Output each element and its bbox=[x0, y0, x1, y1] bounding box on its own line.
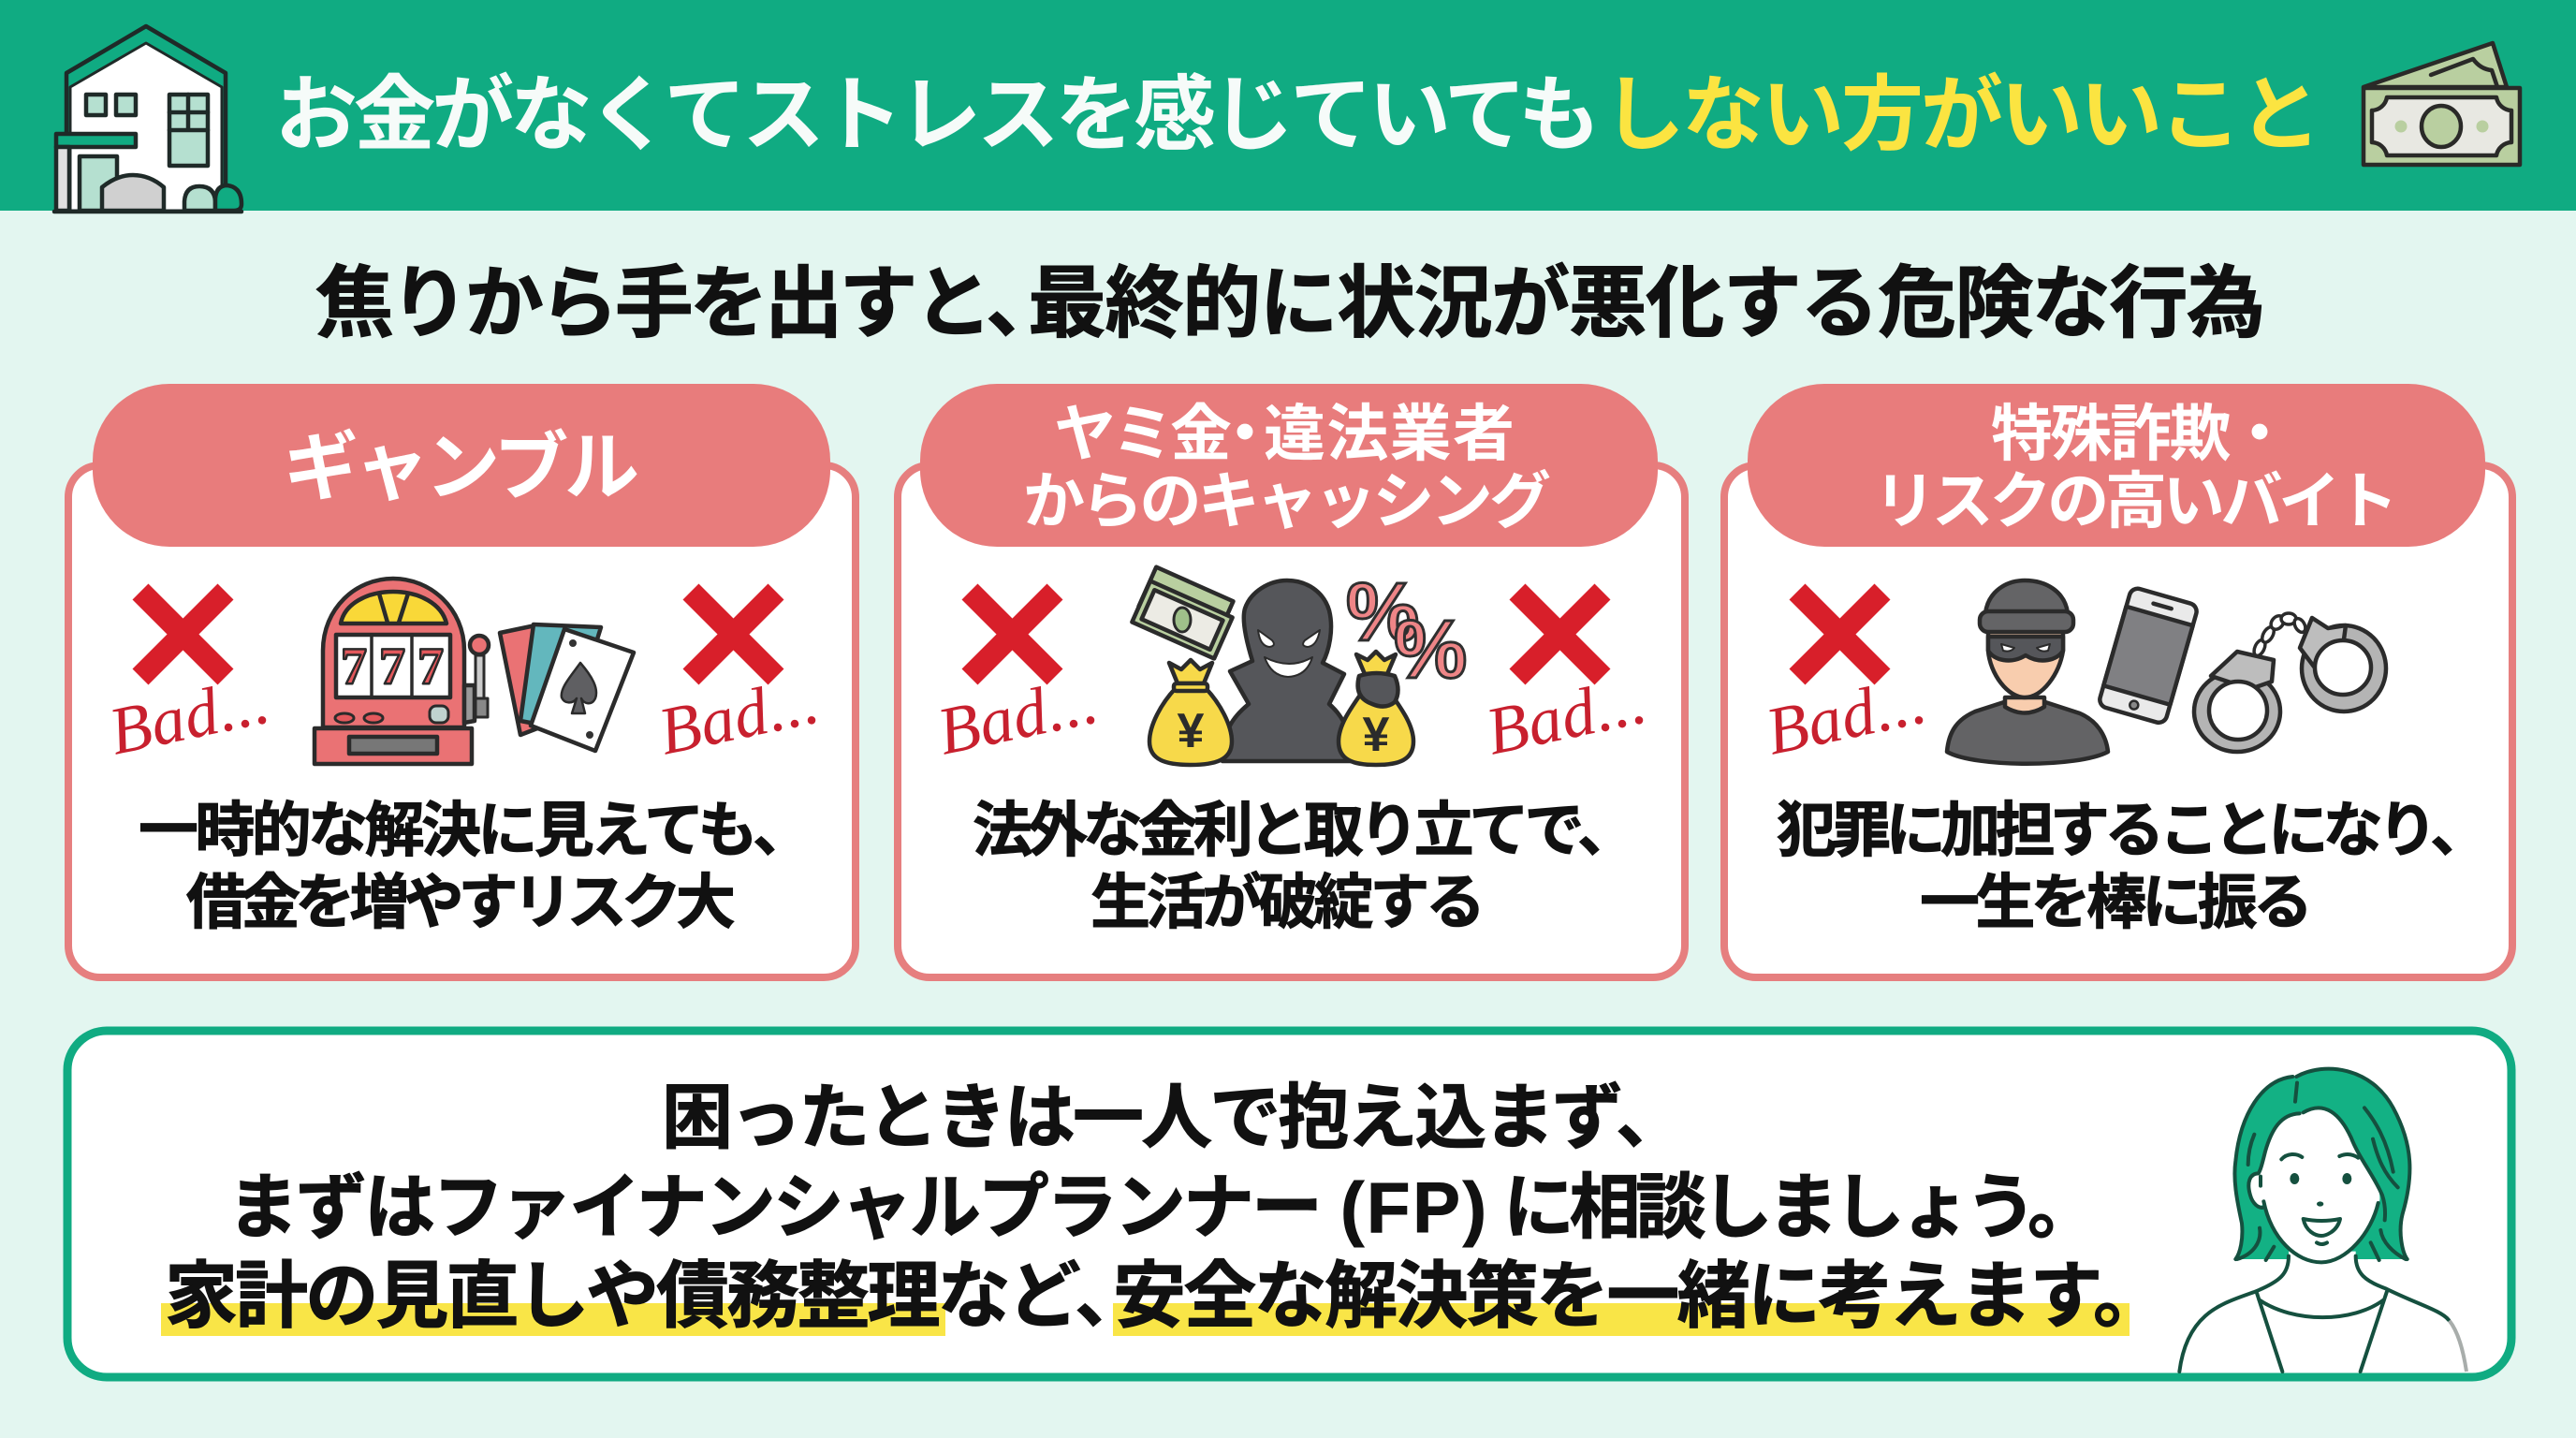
panel: gambling bbox=[68, 384, 856, 977]
advice text: に相談しましょう。 bbox=[1503, 1168, 2099, 1248]
advice text: 家計の見直しや債務整理など、 bbox=[165, 1255, 1148, 1337]
advice text: まずはファイナンシャルプランナー bbox=[227, 1168, 1323, 1248]
title: お金がなくてストレスを感じていても bbox=[275, 68, 1601, 161]
card text: fraud jobs: 犯罪に加担することになり、 bbox=[1777, 797, 2490, 864]
pill heading: fraud jobs: リスクの高いバイト bbox=[1874, 466, 2398, 536]
icon: money bag right bbox=[1339, 652, 1413, 765]
bad label right: Bad... bbox=[1480, 663, 1653, 770]
card text: gambling bbox=[139, 797, 812, 936]
pill heading: loan sharks: ・ bbox=[1214, 399, 1276, 468]
bad label right: Bad... bbox=[652, 663, 826, 770]
icon: cross right bbox=[691, 592, 776, 677]
icon: cross right bbox=[1517, 592, 1603, 677]
pill heading: gambling: ギャンブル bbox=[284, 426, 639, 509]
icon: masked thief bbox=[1947, 580, 2108, 764]
bad label left: Bad... bbox=[931, 663, 1105, 770]
title bbox=[275, 68, 2321, 161]
icon: smartphone bbox=[2098, 587, 2199, 725]
pill heading: loan sharks bbox=[920, 384, 1658, 547]
subtitle bbox=[315, 259, 2265, 347]
icon: house bbox=[54, 26, 242, 212]
advice text bbox=[165, 1078, 2166, 1337]
icon: handcuffs bbox=[2194, 613, 2386, 752]
subtitle: 最終的に状況が悪化する危険な行為 bbox=[1028, 259, 2265, 347]
title: しない方がいいこと bbox=[1603, 68, 2321, 161]
icon: slot machine bbox=[315, 579, 489, 764]
advice text: 困ったときは一人で抱え込まず、 bbox=[662, 1078, 1687, 1158]
icon: money bag left: ¥ bbox=[1178, 704, 1205, 758]
bad label left: Bad... bbox=[1760, 663, 1933, 770]
card text: fraud jobs: 一生を棒に振る bbox=[1920, 869, 2313, 936]
card text: fraud jobs bbox=[1777, 797, 2490, 936]
icon: percent signs: % bbox=[1346, 565, 1419, 658]
icon: percent signs: % bbox=[1394, 603, 1467, 696]
icon: cross left bbox=[970, 592, 1055, 677]
card text: loan sharks: 法外な金利と取り立てで、 bbox=[973, 797, 1637, 864]
bad label left: Bad... bbox=[103, 663, 276, 770]
icon: cross left bbox=[1797, 592, 1882, 677]
highlight: debt review bbox=[161, 1303, 945, 1336]
pill heading: loan sharks: 違法業者 bbox=[1264, 399, 1515, 468]
icon: slot machine: 7 bbox=[417, 638, 444, 696]
advice text: (FP) bbox=[1340, 1168, 1486, 1248]
subtitle: 焦りから手を出すと、 bbox=[315, 259, 1064, 347]
panel: fraud jobs bbox=[1724, 384, 2512, 977]
pill heading: gambling bbox=[93, 384, 830, 547]
pill heading: loan sharks: ヤミ金 bbox=[1054, 399, 1232, 468]
icon: hooded loan shark bbox=[1222, 580, 1353, 761]
icon: money bag right: ¥ bbox=[1363, 708, 1390, 762]
icon: cross left bbox=[140, 592, 226, 677]
panel: loan sharks bbox=[898, 384, 1685, 977]
header band bbox=[0, 0, 2576, 212]
icon: consultant woman bbox=[2179, 1069, 2466, 1372]
icon: banknotes tilted bbox=[1132, 567, 1233, 658]
pill heading: fraud jobs: 特殊詐欺・ bbox=[1991, 399, 2291, 468]
highlight: safe solution bbox=[1113, 1303, 2130, 1336]
card text: gambling: 借金を増やすリスク大 bbox=[186, 869, 736, 936]
icon: percent signs bbox=[1346, 565, 1467, 696]
pill heading: loan sharks: からのキャッシング bbox=[1023, 466, 1551, 536]
icon: banknotes bbox=[2364, 43, 2520, 165]
icon: slot machine: 7 bbox=[379, 638, 405, 696]
icon: money bag left bbox=[1149, 660, 1232, 765]
card text: loan sharks bbox=[973, 797, 1637, 936]
icon: slot machine: 7 bbox=[341, 638, 367, 696]
card text: gambling: 一時的な解決に見えても、 bbox=[139, 797, 812, 864]
icon: playing cards bbox=[500, 624, 634, 751]
panel: advice callout bbox=[67, 1031, 2511, 1377]
advice text: 安全な解決策を一緒に考えます。 bbox=[1113, 1255, 2166, 1337]
card text: loan sharks: 生活が破綻する bbox=[1090, 869, 1486, 936]
pill heading: fraud jobs bbox=[1748, 384, 2485, 547]
